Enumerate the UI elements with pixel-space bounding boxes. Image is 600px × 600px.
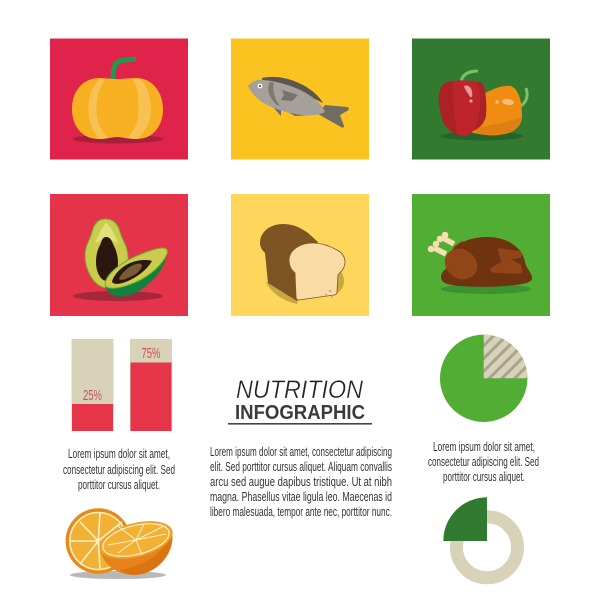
text block: pie chart caption: consectetur adipiscing elit. Sed	[428, 455, 539, 469]
bar chart	[72, 339, 172, 431]
text block: main paragraph: elit. Sed porttitor cursus aliquet. Aliquam convallis	[210, 460, 392, 474]
text block: pie chart caption: Lorem ipsum dolor sit amet,	[433, 440, 535, 454]
panel: fish	[231, 38, 369, 160]
text block: main paragraph: arcu sed augue dapibus tristique. Ut at nibh	[210, 475, 392, 489]
text block: main paragraph: libero malesuada, tempor ante nec, porttitor nunc.	[210, 505, 392, 519]
panel: turkey	[412, 194, 550, 316]
panel: peppers	[412, 38, 550, 160]
panel: bread	[231, 194, 369, 316]
text block: main paragraph: Lorem ipsum dolor sit amet, consectetur adipiscing	[210, 445, 392, 459]
text block: bar chart caption: consectetur adipiscing elit. Sed	[63, 463, 175, 477]
title: INFOGRAPHIC	[235, 402, 365, 424]
text block: pie chart caption: porttitor cursus aliquet.	[443, 470, 525, 484]
panel: avocado	[50, 194, 188, 316]
text block: main paragraph: magna. Phasellus vitae ligula leo. Maecenas id	[210, 490, 392, 504]
text block: pie chart caption	[428, 440, 539, 484]
text block: bar chart caption: Lorem ipsum dolor sit amet,	[68, 447, 170, 461]
title	[228, 376, 372, 425]
donut chart	[443, 497, 518, 578]
panel: pumpkin	[50, 38, 188, 160]
text block: bar chart caption: porttitor cursus aliquet.	[78, 478, 160, 492]
text block: bar chart caption	[63, 447, 175, 492]
icon: orange	[66, 508, 176, 579]
title: NUTRITION	[236, 376, 364, 404]
bar: 75%: 75%	[142, 345, 160, 362]
bar: 25%: 25%	[83, 387, 102, 404]
text block: main paragraph	[210, 445, 392, 519]
pie chart	[440, 335, 527, 422]
